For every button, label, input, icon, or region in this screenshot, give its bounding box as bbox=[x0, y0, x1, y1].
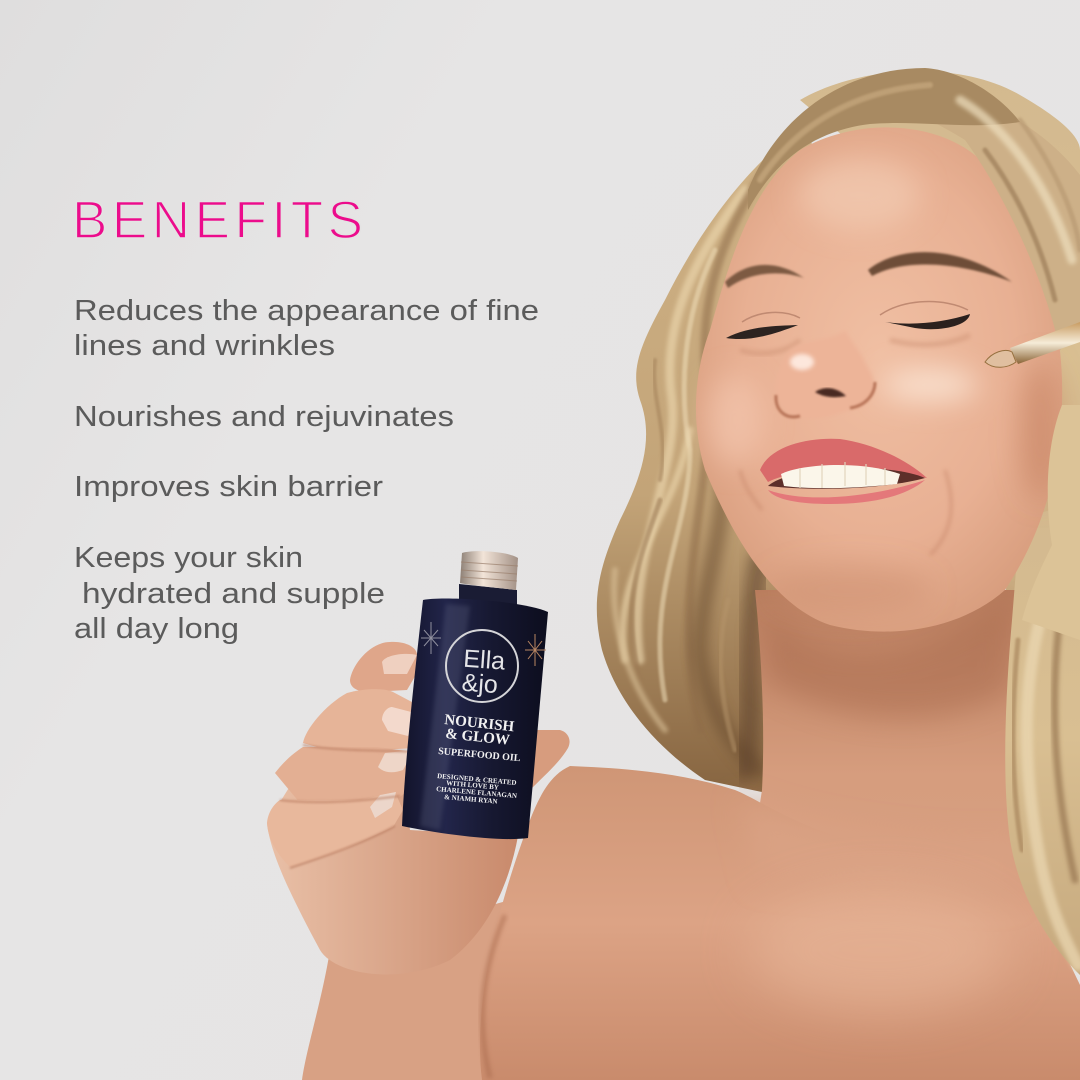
nail two bbox=[382, 707, 419, 736]
finger three bbox=[275, 747, 420, 803]
armpit crease bbox=[483, 915, 505, 1078]
finger four bbox=[267, 792, 403, 867]
benefit: hydrated: all day long bbox=[74, 613, 239, 645]
product label: WITH LOVE BY bbox=[446, 779, 499, 792]
benefit: fine lines: lines and wrinkles bbox=[74, 330, 335, 362]
left closed eye bbox=[726, 312, 800, 339]
mouth bbox=[760, 439, 927, 504]
right closed eye bbox=[880, 302, 970, 329]
cheek and forehead light bbox=[707, 160, 1060, 615]
benefit: hydrated bbox=[74, 542, 385, 645]
benefit: skin barrier: Improves skin barrier bbox=[74, 471, 383, 503]
arm bbox=[302, 900, 510, 1080]
under-eye shadows bbox=[740, 335, 970, 353]
product label: & GLOW bbox=[445, 726, 510, 749]
product bottle bbox=[402, 551, 548, 839]
benefit: fine lines: Reduces the appearance of fine bbox=[74, 295, 539, 327]
woman portrait bbox=[480, 68, 1080, 1080]
logo text bbox=[461, 645, 506, 699]
product label: & NIAMH RYAN bbox=[444, 793, 498, 806]
nose bbox=[776, 330, 875, 419]
face bbox=[696, 127, 1062, 632]
thumb behind bottle bbox=[530, 730, 570, 790]
neck shadow bbox=[765, 590, 1015, 718]
bottle neck bbox=[459, 584, 517, 610]
finger one bbox=[350, 642, 417, 692]
shoulder and chest bbox=[480, 766, 1080, 1080]
hair front fringe right bbox=[880, 75, 1080, 350]
product label: SUPERFOOD OIL bbox=[438, 746, 521, 764]
hair right curl bbox=[1022, 405, 1080, 640]
hair strand texture left bbox=[614, 170, 765, 770]
neck blend bbox=[740, 800, 1020, 900]
bottle body bbox=[402, 598, 548, 839]
benefit: fine lines bbox=[74, 295, 539, 362]
benefit: hydrated: Keeps your skin bbox=[74, 542, 303, 574]
logo ring bbox=[446, 630, 518, 702]
dropper bbox=[985, 322, 1080, 367]
neck bbox=[730, 590, 1030, 1000]
hair lower right bbox=[1005, 500, 1080, 975]
benefit: hydrated: hydrated and supple bbox=[82, 578, 385, 610]
product label: DESIGNED & CREATED bbox=[437, 772, 517, 787]
logo text: &jo bbox=[461, 669, 499, 699]
benefit: nourishes: Nourishes and rejuvinates bbox=[74, 401, 454, 433]
bottle cap thread bbox=[460, 551, 518, 590]
chest highlight bbox=[750, 890, 1010, 1010]
palm bbox=[267, 760, 518, 974]
benefits list bbox=[74, 295, 539, 645]
product label: NOURISH bbox=[444, 712, 515, 735]
right eyebrow bbox=[868, 252, 1012, 282]
product label: CHARLENE FLANAGAN bbox=[436, 785, 517, 800]
nail four bbox=[370, 792, 396, 818]
nail three bbox=[378, 750, 414, 772]
smile folds bbox=[740, 470, 951, 555]
title: BENEFITS bbox=[72, 191, 363, 250]
hand bbox=[267, 642, 570, 974]
hair back right bbox=[800, 71, 1080, 640]
finger two bbox=[303, 689, 428, 750]
logo text: Ella bbox=[462, 645, 506, 676]
bottle highlight bbox=[420, 604, 470, 830]
hair top bbox=[748, 68, 1020, 210]
hair top strands bbox=[760, 85, 1080, 300]
left eyebrow bbox=[725, 265, 804, 288]
sparkle decorations bbox=[421, 622, 546, 666]
nail one bbox=[382, 654, 417, 674]
hair back left bbox=[597, 120, 830, 800]
finger creases bbox=[280, 745, 420, 868]
cap ridges bbox=[461, 562, 518, 581]
hair lower right strands bbox=[1013, 600, 1078, 965]
product label bbox=[436, 712, 521, 806]
